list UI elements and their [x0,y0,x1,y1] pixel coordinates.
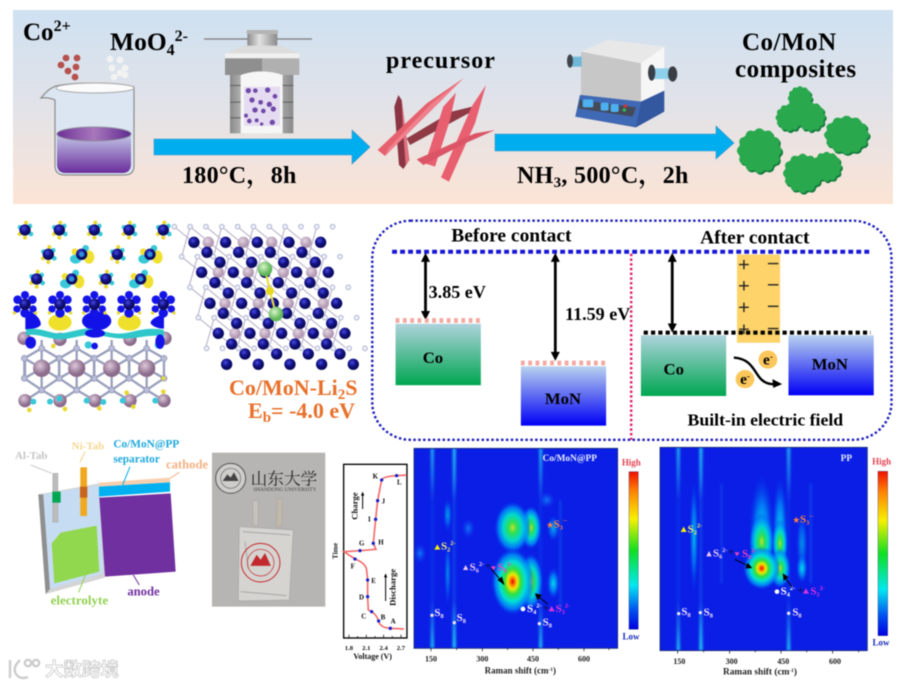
colorbar [622,457,641,642]
label: Ni-Tab: Ni-Tab [72,440,104,452]
icon: electron top: - [770,352,773,362]
species labels: + [543,602,549,614]
point labels [351,473,402,626]
x axis ticks: 600 [578,654,590,663]
species labels: 8 [549,622,552,629]
x axis title: -1 [789,668,794,674]
anode layer [99,493,176,577]
box: Co before contact [396,324,481,385]
species labels: ♥ [735,549,740,558]
species labels: 2- [790,585,795,592]
heading: Co2+: Co [23,19,54,46]
x axis ticks: 1.8 [345,645,354,652]
university name: 山东大学 [251,469,318,488]
species labels: ·- [563,518,567,525]
species labels: S [457,612,463,624]
streaks [677,447,812,651]
species labels: ♥ [491,563,496,572]
label: Al-Tab: Al-Tab [15,450,48,462]
x axis title: ) [794,667,797,678]
point labels: F [351,562,355,570]
label: NH3, 500°C, 2h: 3 [554,175,561,191]
species labels: ★ [546,521,554,530]
x axis ticks: 2.4 [379,645,388,652]
electrolyte sheet [52,526,99,583]
heading: MoO4 2-: MoO [110,27,167,56]
species labels: S [713,548,719,560]
value: 3.85 eV: 3.85 eV [429,283,486,302]
icon: Co/MoN flakes [737,86,871,195]
chart: Raman heatmap Co/MoN@PP [413,448,641,676]
label: Co/MoN@PP separator: separator [113,453,160,465]
species labels: 2- [536,602,542,609]
species labels: S [441,541,447,553]
species labels: + [485,560,491,572]
charge arrow: Charge [349,492,359,520]
heading: Co2+: 2+ [54,18,71,35]
species labels: ·- [809,513,813,520]
heading: Co/MoN composites: composites [735,56,857,83]
box: MoN after contact: MoN [812,355,848,374]
Co atoms with charge lobes [13,221,176,318]
charge arrow [349,492,364,520]
Li2S molecule [258,262,283,321]
label: Co/MoN-Li2S binding energy: Co/MoN-Li [229,375,338,400]
species labels: S [792,606,798,618]
label: Co/MoN-Li2S binding energy: E [248,398,355,426]
separator sheet left [38,483,105,594]
species labels: 2- [751,547,757,554]
species labels: + [797,585,804,597]
chart: voltage profile [331,464,407,661]
colorbar: High [622,457,641,467]
species labels: 2- [479,561,484,568]
colorbar: Low [622,632,640,642]
pouch [238,527,293,601]
point labels: L [397,479,402,487]
x axis ticks: 150 [673,657,685,666]
species labels: 4 [787,592,791,599]
icon: beaker with purple solution [41,83,134,175]
panel title: Co/MoN@PP [543,454,597,464]
cathode layer [99,478,170,487]
box: MoN after contact [788,335,874,395]
species labels: S [498,562,504,574]
x axis ticks: 450 [527,654,539,663]
icon: cobalt ions [58,55,80,80]
heading: Co/MoN composites: Co/MoN [742,29,837,56]
x axis ticks [425,654,590,663]
heading: MoO4 2-: 4 [167,42,175,59]
icon: electron bottom [736,370,754,388]
point labels: K [373,473,379,481]
colorbar: Low [872,638,890,648]
Ni tab [80,467,87,516]
panel: pouch cell schematic [15,439,209,607]
species labels: S [742,548,748,560]
species labels: 2- [565,602,570,609]
species labels: S [434,607,440,619]
icon: precursor rods [378,78,495,182]
x axis ticks [673,657,841,666]
box: MoN before contact [521,366,606,426]
x axis ticks: 2.7 [397,645,406,652]
species labels: 8 [463,618,466,625]
species labels: S [810,586,816,598]
label: Built-in electric field: Built-in electric field [688,410,843,429]
watermark [10,656,119,682]
colorbar [872,457,891,648]
tabs [253,498,283,527]
species labels: 6 [719,554,722,561]
box: Co after contact: Co [664,360,684,378]
species labels: 3 [562,609,565,616]
species labels: 2- [697,523,702,530]
point labels: A [391,618,396,626]
panel title: PP [841,454,852,464]
label: Co/MoN-Li2S binding energy: b [263,410,271,426]
label: Co/MoN-Li2S binding energy: 2 [338,387,345,403]
point labels: B [381,613,386,621]
university logo [216,463,246,493]
label: electrolyte: electrolyte [51,592,108,607]
value: 11.59 eV: 11.59 eV [565,304,630,324]
arrow: nitridation step [495,126,734,159]
icon: molybdate ions [107,56,128,80]
heading: After contact: After contact [700,228,810,249]
species labels: S [800,514,806,526]
icon: tube furnace [567,40,677,127]
icon: hydrothermal autoclave [204,30,312,133]
species labels: 8 [710,612,713,619]
heading: precursor: precursor [386,48,496,74]
point labels: D [359,594,364,602]
species labels: 2- [507,561,512,568]
heading: MoO4 2-: 2- [175,28,188,45]
panel: Li2S adsorption top view [172,224,367,370]
point labels: H [378,539,384,547]
charges [739,260,778,334]
Co atoms [188,237,359,370]
species labels: 6 [476,568,479,575]
label: 180°C, 8h: 180°C，8h [182,163,297,189]
point labels: J [382,498,386,506]
spots [689,475,808,593]
label: Co/MoN-Li2S binding energy: = -4.0 eV [271,398,355,423]
watermark text: 大数跨境 [45,656,119,682]
label: Co/MoN@PP separator: Co/MoN@PP [113,439,179,451]
panel: pouch cell photo [212,453,325,607]
x axis title: -1 [549,667,553,673]
printed logo [241,543,280,582]
label: anode: anode [127,585,160,599]
species labels: S [704,606,710,618]
x axis title: Raman shift (cm [723,668,789,678]
arrow: hydrothermal step [154,130,370,164]
species labels: + [728,547,734,559]
species labels [677,513,825,619]
panel: synthesis process [13,10,893,204]
x axis ticks [345,645,406,652]
panel: energy band diagram [372,221,891,440]
Mo atoms [203,237,334,339]
icon: electron bottom: e [740,372,747,388]
x axis ticks: 450 [777,657,789,666]
lower MoN lattice [17,332,172,412]
x axis title: Voltage (V) [353,652,392,661]
colorbar: High [872,457,891,467]
species labels: ★ [793,515,801,524]
species labels: 2 [447,547,450,554]
species labels: S [470,562,476,574]
streaks [431,448,562,648]
band: field region [737,254,780,343]
box: MoN before contact: MoN [545,389,581,408]
isosurface lobes at interface [25,310,165,349]
point labels: E [371,577,376,585]
species labels: 2- [820,585,825,592]
spots [413,492,560,615]
species labels: 8 [440,613,444,620]
watermark logo [10,660,39,678]
lattice bonds [172,224,367,351]
species labels: 2 [694,529,697,536]
discharge arrow: Discharge [388,569,398,606]
species labels: 3 [816,592,820,599]
x axis ticks: 150 [425,654,437,663]
species labels: S [781,586,787,598]
species labels: 2- [450,540,456,547]
point labels: I [368,515,371,523]
label: Co/MoN-Li2S binding energy: S [345,375,358,400]
heading: Before contact: Before contact [451,226,572,247]
panel: charge density difference side view [13,221,176,412]
species labels: 2- [722,547,728,554]
species labels: S [543,616,549,628]
label: cathode: cathode [166,457,209,471]
university name: SHANDONG UNIVERSITY [253,487,317,493]
species labels: 4 [533,609,537,616]
species labels: 8 [504,568,507,575]
species labels: S [556,603,562,615]
label: NH3, 500°C, 2h: , 500°C，2h [561,163,689,189]
x axis ticks: 300 [476,654,488,663]
species labels: S [681,606,687,618]
species labels: S [554,518,560,530]
species labels [430,518,570,629]
x axis ticks: 300 [726,657,738,666]
arrow: Co gap before contact [421,253,430,320]
box: Co after contact [641,335,726,396]
point labels: G [359,540,365,548]
species labels: 3 [806,520,809,527]
separator layer [99,482,170,497]
species labels: 8 [798,612,802,619]
species labels: 8 [748,554,751,561]
arrow: electron transfer [734,358,782,388]
arrows [735,559,792,587]
label: NH3, 500°C, 2h: NH [517,163,554,189]
Al tab [52,473,61,522]
arrow: MoN gap before contact [551,253,560,361]
chart: Raman heatmap PP [660,447,891,678]
icon: electron bottom: - [747,371,750,381]
box: Co before contact: Co [423,348,443,367]
x axis ticks: 2.1 [362,645,370,652]
arrows [491,568,548,604]
x axis ticks: 600 [829,657,841,666]
icon: electron top: e [763,352,770,368]
species labels: 8 [687,612,691,619]
species labels: S [527,603,533,615]
icon: electron top [759,350,777,369]
species labels: S [688,523,694,535]
x axis title: Raman shift (cm [485,666,549,676]
point labels: C [361,613,366,621]
x axis title: ) [553,666,556,676]
y axis title: Time [331,542,340,559]
arrow: gap after contact [668,253,677,333]
species labels: 3 [560,524,563,531]
